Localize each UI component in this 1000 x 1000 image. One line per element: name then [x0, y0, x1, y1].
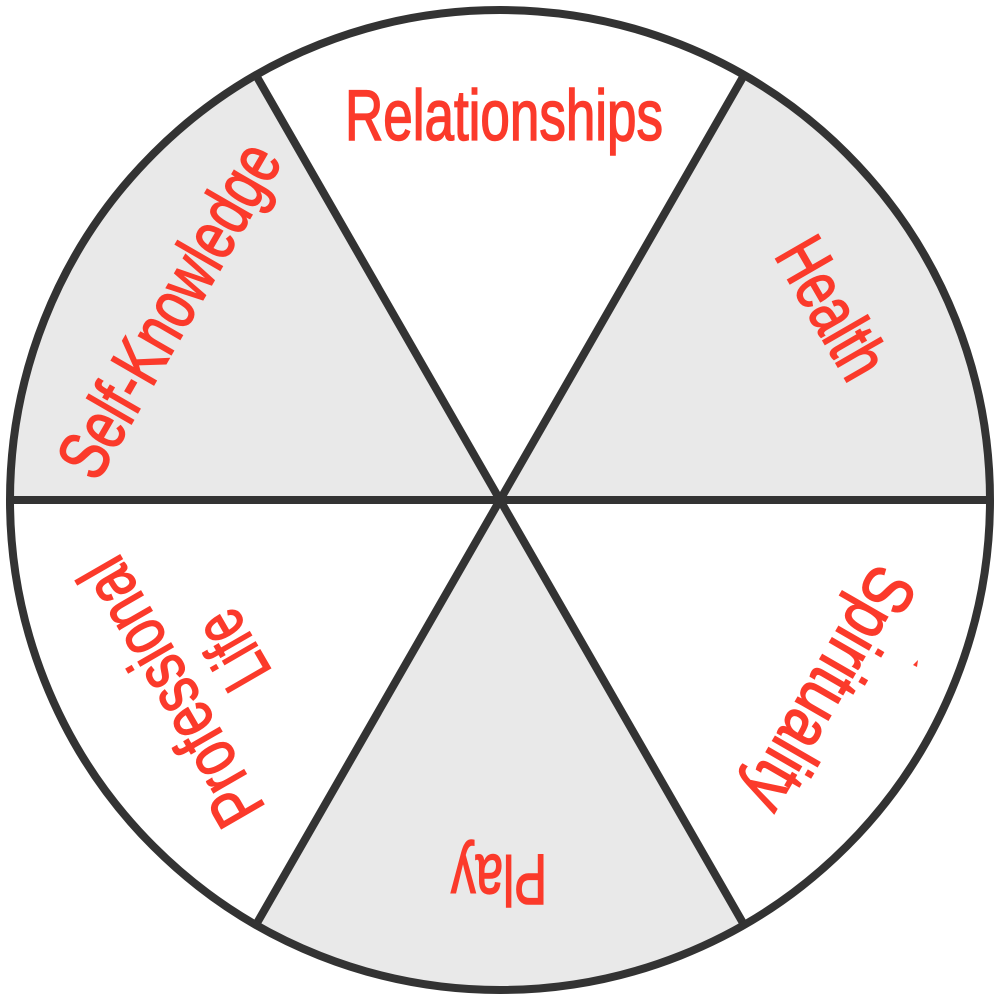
label: Relationships: Relationships	[345, 77, 663, 156]
panel: self-knowledge wedge	[10, 77, 500, 500]
label: Play: Play	[451, 839, 547, 918]
label: Health: Health	[760, 224, 903, 393]
label: Professional Life	[63, 544, 286, 840]
panel: health wedge	[500, 77, 990, 500]
panel: play wedge	[257, 500, 743, 987]
label line: Professional: Professional	[63, 544, 280, 840]
small red speck	[913, 660, 918, 667]
label: Self-Knowledge: Self-Knowledge	[42, 129, 297, 492]
label: Spirituality: Spirituality	[727, 553, 931, 827]
label line: Life: Life	[179, 596, 286, 703]
